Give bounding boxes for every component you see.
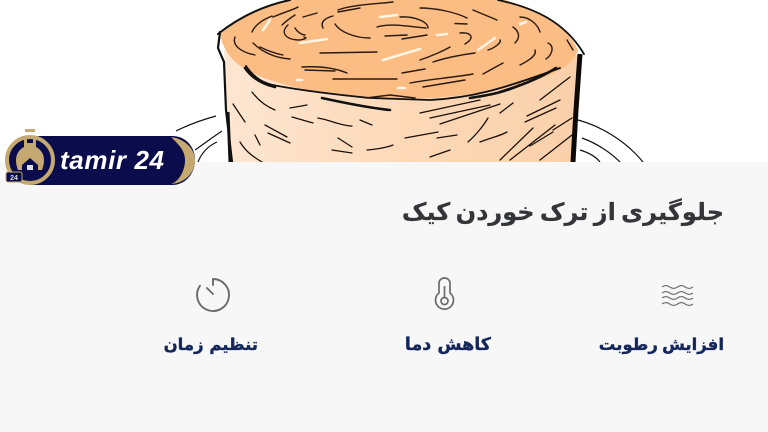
title: جلوگیری از ترک خوردن کیک	[402, 198, 724, 226]
icon: thermometer (lower temperature)	[434, 277, 454, 310]
cake top highlights	[263, 15, 526, 88]
illustration: cake sketch	[176, 0, 644, 162]
cake top strokes	[234, 2, 573, 98]
cake top	[220, 0, 578, 99]
label: lower temperature: کاهش دما	[405, 335, 491, 355]
label: set the time: تنظیم زمان	[164, 335, 258, 354]
logo text: tamir 24	[60, 145, 165, 175]
cake side strokes	[233, 77, 572, 162]
cake right edge	[573, 54, 580, 162]
plate lines	[176, 116, 643, 162]
cake outlines	[218, 0, 584, 162]
logo: tamir 24	[5, 129, 195, 185]
logo right arc	[171, 137, 195, 184]
icon: waves (humidity)	[662, 285, 694, 306]
bottom panel	[0, 162, 768, 432]
label: increase humidity: افزایش رطوبت	[599, 335, 724, 354]
logo round emblem	[6, 129, 53, 183]
cake left edge	[228, 112, 230, 162]
cake side	[224, 50, 582, 165]
logo round emblem: 24	[10, 175, 18, 182]
icon: timer (set the time)	[196, 278, 230, 312]
logo banner	[30, 136, 195, 185]
